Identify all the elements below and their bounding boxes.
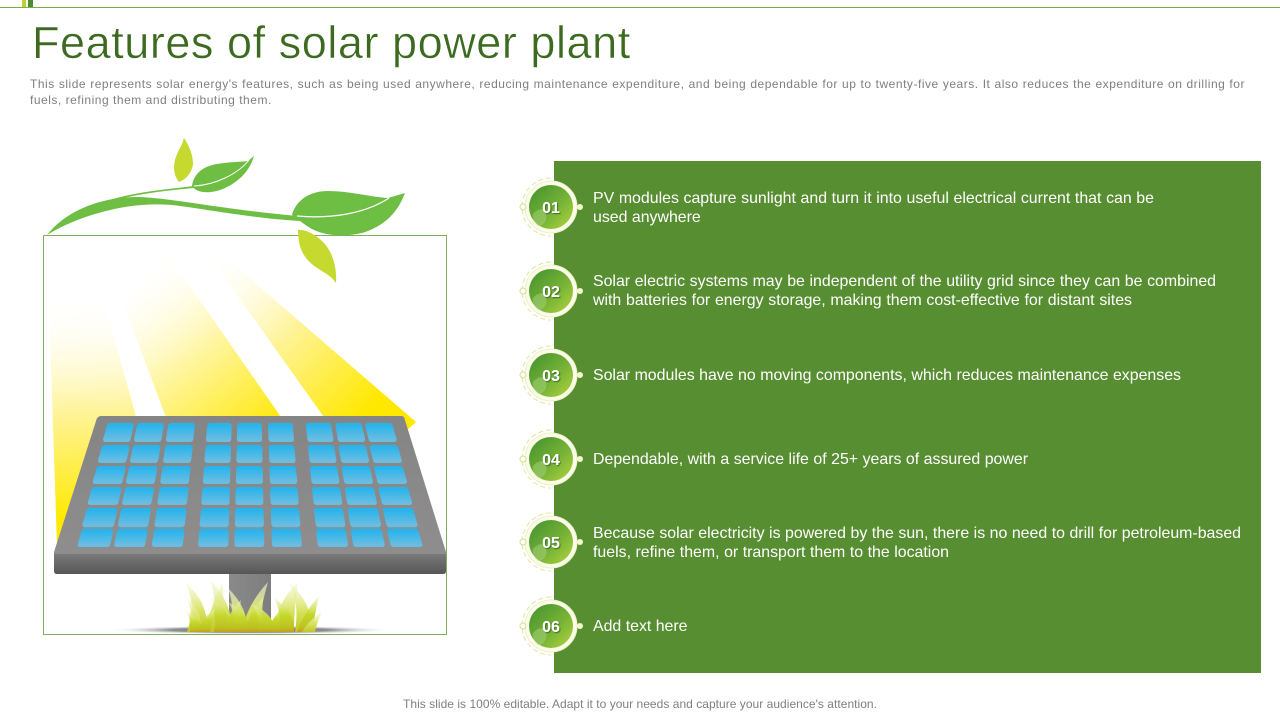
- title: Features of solar power plant: [32, 17, 631, 68]
- sun rays: [49, 250, 416, 545]
- badge 02: 02: [542, 284, 560, 301]
- badge 03: [520, 346, 583, 404]
- description: This slide represents solar energy's features, such as being used anywhere, reducing maintenance expenditure, and being dependable for up to twenty-five years. It also reduces the expenditure on drilling for: [30, 77, 1245, 91]
- badge 06: 06: [542, 619, 560, 636]
- badge 05: [520, 513, 583, 571]
- feature text 03: Solar modules have no moving components, which reduces maintenance expenses: [593, 367, 1181, 384]
- badge 05: 05: [542, 535, 560, 552]
- leaf: upper: [192, 156, 254, 192]
- grass: [185, 580, 322, 632]
- description: [30, 77, 1245, 107]
- feature text 02: [593, 273, 1216, 309]
- panel top face: [54, 416, 446, 555]
- number badges: [520, 178, 583, 656]
- feature text 05: [593, 525, 1241, 561]
- top accent line: [0, 7, 1280, 8]
- badge 06: [520, 597, 583, 655]
- sub-branch: [95, 186, 194, 205]
- frame: [44, 236, 446, 634]
- panel front edge: [54, 554, 446, 574]
- leaf vein: upper: [194, 160, 249, 186]
- feature text 05: fuels, refine them, or transport them to the location: [593, 544, 949, 561]
- badge 03: 03: [542, 368, 560, 385]
- solar cells: [79, 424, 421, 546]
- badge 04: 04: [542, 452, 560, 469]
- badge 02: [520, 262, 583, 320]
- post: [229, 572, 271, 624]
- description: fuels, refining them and distributing them.: [30, 93, 272, 107]
- green content panel: [554, 161, 1261, 673]
- badge 01: [520, 178, 583, 236]
- leaf: lower yellow-green: [298, 230, 336, 283]
- badge 01: 01: [542, 200, 560, 217]
- feature text 04: Dependable, with a service life of 25+ years of assured power: [593, 451, 1028, 468]
- feature text 02: with batteries for energy storage, making them cost-effective for distant sites: [593, 292, 1132, 309]
- feature text 05: Because solar electricity is powered by the sun, there is no need to drill for petroleum-based: [593, 525, 1241, 542]
- stem: [47, 197, 300, 235]
- top accent bars: [22, 0, 33, 7]
- feature text 01: PV modules capture sunlight and turn it into useful electrical current that can be: [593, 190, 1154, 207]
- footer note: This slide is 100% editable. Adapt it to your needs and capture your audience's attention.: [403, 697, 877, 711]
- leaf: top yellow-green: [174, 138, 193, 182]
- feature text 01: used anywhere: [593, 209, 701, 226]
- leaf: large: [292, 191, 405, 235]
- illustration: solar panel with leaves: [43, 138, 447, 635]
- branch with leaves: [47, 138, 405, 283]
- badge 04: [520, 430, 583, 488]
- feature text 02: Solar electric systems may be independent of the utility grid since they can be combined: [593, 273, 1216, 290]
- ground shadow: [105, 626, 395, 634]
- feature text 06: Add text here: [593, 618, 688, 635]
- leaf vein: large: [297, 198, 389, 217]
- feature text 01: [593, 190, 1154, 226]
